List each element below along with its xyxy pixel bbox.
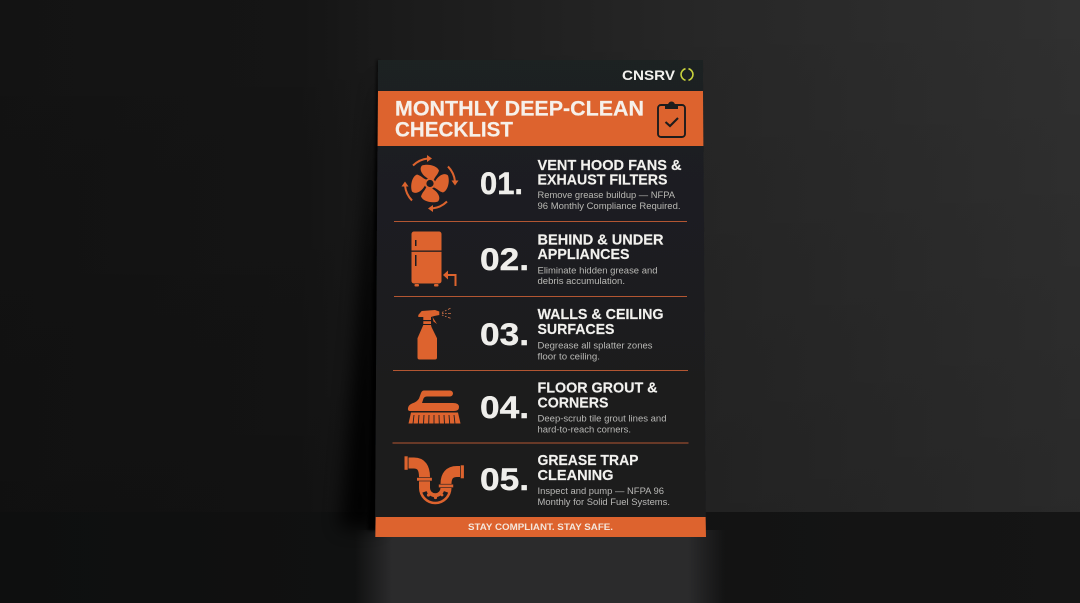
item description: debris accumulation. (538, 276, 625, 287)
brand logo: CNSRV (622, 67, 676, 83)
item description (538, 414, 666, 435)
item heading: CORNERS (538, 394, 608, 411)
item heading: VENT HOOD FANS & (538, 157, 682, 174)
brand logo (622, 67, 693, 83)
item description: floor to ceiling. (538, 351, 600, 362)
footer banner (375, 517, 706, 537)
item heading: CLEANING (538, 467, 614, 484)
item heading: WALLS & CEILING (538, 306, 664, 323)
item description: Eliminate hidden grease and (538, 265, 658, 276)
item description: Inspect and pump — NFPA 96 (538, 486, 664, 497)
floor reflection (355, 530, 725, 603)
title (395, 97, 644, 142)
item description: Degrease all splatter zones (538, 341, 653, 352)
icon: spray bottle (418, 308, 451, 360)
item heading: BEHIND & UNDER (538, 231, 664, 248)
icon: fan (402, 155, 458, 212)
item heading: GREASE TRAP (538, 452, 638, 469)
row 5: grease trap (404, 452, 670, 508)
row 1: vent hood fans (402, 155, 682, 212)
item description: hard-to-reach corners. (538, 424, 631, 435)
icon: clipboard (658, 102, 685, 137)
item heading: EXHAUST FILTERS (538, 171, 668, 188)
item description: Remove grease buildup — NFPA (538, 190, 676, 201)
row 2: behind appliances (412, 231, 664, 287)
item description (538, 265, 658, 287)
item heading (538, 306, 664, 338)
title: CHECKLIST (395, 118, 513, 142)
item number: 01. (480, 165, 523, 201)
item number: 04. (480, 389, 529, 425)
item description (538, 341, 653, 362)
icon: refrigerator (412, 232, 456, 286)
row 3: walls and ceiling (418, 306, 664, 362)
item heading (538, 231, 664, 263)
item description: Monthly for Solid Fuel Systems. (538, 497, 670, 508)
item description: 96 Monthly Compliance Required. (538, 201, 680, 212)
poster (375, 60, 706, 537)
footer banner: STAY COMPLIANT. STAY SAFE. (468, 522, 613, 533)
item number: 03. (480, 316, 529, 352)
icon: P-trap pipe (404, 456, 464, 499)
icon: scrub brush (408, 390, 460, 424)
item heading (538, 379, 658, 411)
item heading: SURFACES (538, 321, 614, 338)
title: MONTHLY DEEP-CLEAN (395, 97, 644, 121)
item heading (538, 157, 682, 188)
item heading: FLOOR GROUT & (538, 379, 658, 396)
item description: Deep-scrub tile grout lines and (538, 414, 666, 425)
item description (538, 486, 670, 508)
poster shadow (340, 60, 379, 530)
item description (538, 190, 680, 212)
floor (0, 512, 1080, 603)
item number: 02. (480, 241, 529, 277)
item number: 05. (480, 461, 529, 497)
title banner (378, 91, 703, 146)
item heading (538, 452, 638, 484)
row 4: floor grout (408, 379, 666, 435)
item heading: APPLIANCES (538, 246, 630, 263)
